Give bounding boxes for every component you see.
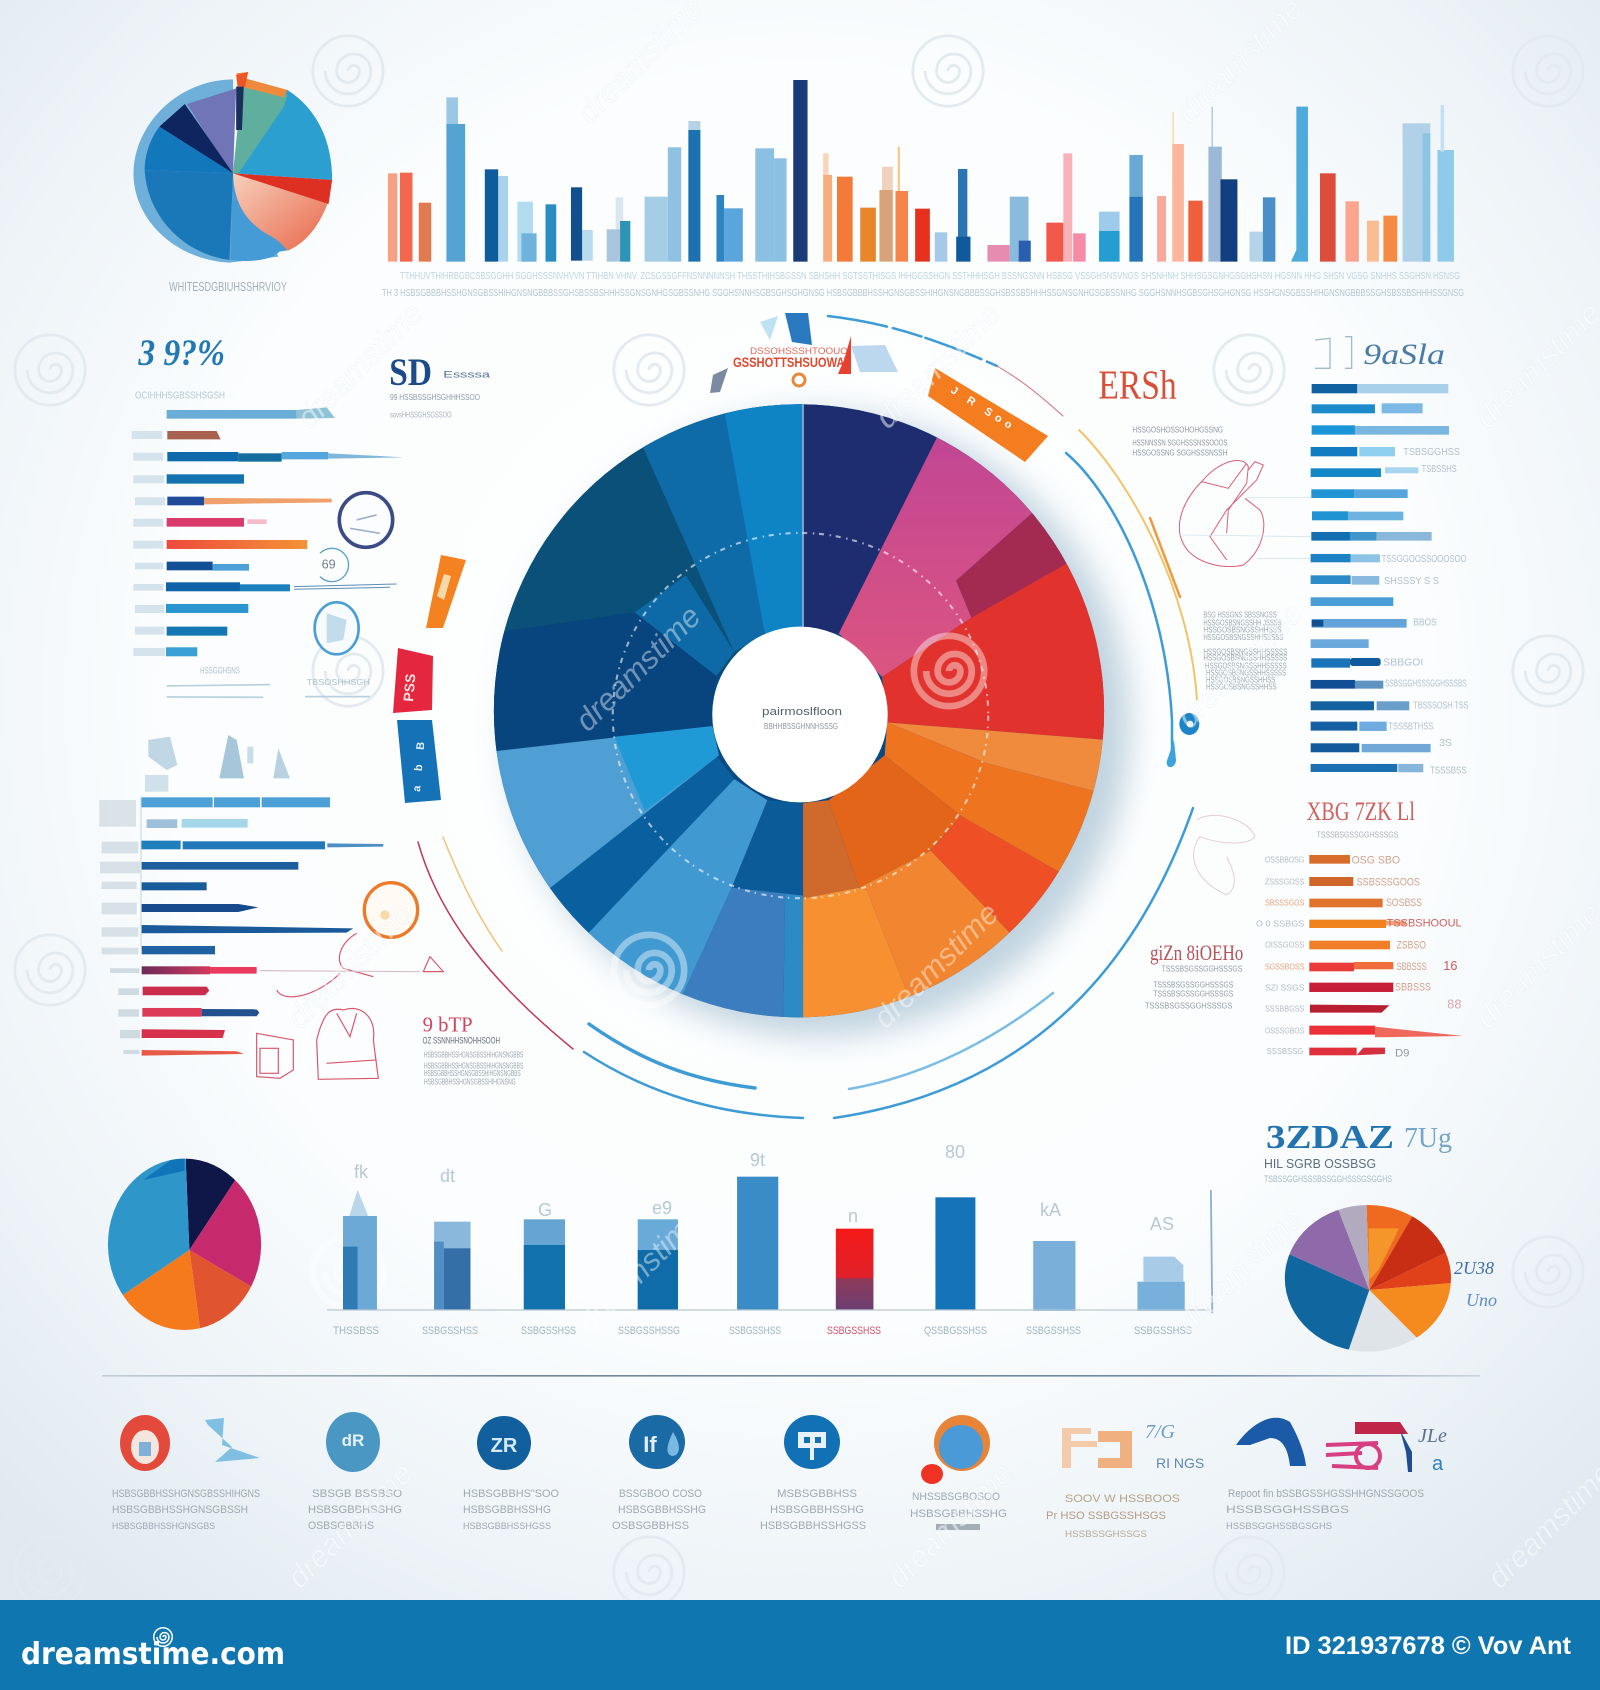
panel: upper right blue bars (1098, 337, 1469, 776)
bottom chart value glyphs: fk (354, 1162, 369, 1182)
rows (1312, 384, 1357, 393)
row: navy and orange (167, 497, 204, 505)
watermark wordmarks: dreamstime (570, 1201, 709, 1340)
row labels: names (1256, 854, 1305, 1056)
icon label: peach sub: RI NGS (1156, 1455, 1204, 1471)
row labels: names: SSSBBGSS (1265, 1004, 1304, 1014)
subheading: SD: SD (389, 350, 432, 394)
footer logo text: dreamstime.com (21, 1637, 285, 1672)
hub text: pairmoslfloon (762, 706, 842, 718)
caption group six: NHSSBSGBOSOO (912, 1491, 1000, 1503)
bottom chart value glyphs: n (848, 1206, 858, 1226)
outer ring arcs around the wheel (418, 316, 1197, 1118)
row labels: values (1352, 854, 1462, 1060)
inner dashed ring (613, 533, 988, 898)
donut wheel chart (494, 404, 1104, 1018)
bottom chart value glyphs: 9t (750, 1150, 765, 1170)
row: navy and light blue (167, 562, 213, 570)
row: brown (167, 431, 221, 439)
footer id text: ID 321937678 © Vov Ant (1285, 1632, 1572, 1660)
segment: orange (859, 850, 1010, 997)
row labels: values: TSSBSHOOUL (1387, 918, 1462, 930)
hub (712, 627, 888, 802)
block text lower: HSSGOSBSNGSSHHSSSSS (1206, 668, 1286, 677)
caption group three: HSBSGBBHSSHG (463, 1504, 551, 1516)
bottom chart labels: SSBGSSHSS (729, 1325, 781, 1337)
block text upper: HSSGOSHOSSOHOHGSSNG (1132, 426, 1223, 435)
icon row (120, 1412, 1447, 1484)
subheading caption: Essssa (443, 369, 491, 379)
center divider (802, 404, 804, 628)
block text: HSBSGBBHSSHGNSGBSSHIHGNSNGBBS (424, 1061, 523, 1070)
block text lower: HSSGOSBSNGSSHHSSS (1203, 626, 1282, 635)
watermark wordmarks: dreamstime (568, 599, 707, 738)
segment: lower dark blue (494, 612, 634, 750)
row: light blue (166, 647, 197, 656)
row: light blue (167, 410, 297, 419)
panel: upper left bars (132, 333, 491, 697)
icon: red badge (120, 1415, 170, 1471)
row labels: names: O 0 SSBGS (1256, 919, 1305, 929)
row labels: values: ZSBSO (1397, 939, 1426, 951)
block text: TSSSBSGSSGGHSSSGS (1162, 964, 1242, 973)
divider (102, 1375, 1480, 1377)
bottom chart value glyphs: AS (1150, 1214, 1174, 1234)
row: plum to pink (142, 966, 210, 974)
pie value label: 2U38 (1454, 1258, 1494, 1278)
block text lower: HSSGOSBSNGSSHHSS (1206, 676, 1275, 685)
icon: orange magnifier (921, 1415, 990, 1484)
bar chart: bottom row left group (343, 1177, 778, 1310)
icon: small ring (320, 548, 349, 582)
row: long blue (142, 925, 353, 933)
panel: lower left bars (99, 735, 523, 1086)
block subheading: OZ SSNNHHSNOHHSOOH (423, 1035, 500, 1045)
heading: 3 9?% (137, 333, 225, 374)
row labels: names: OSSBBOSG (1265, 854, 1305, 864)
bottom chart value glyphs: 80 (945, 1142, 965, 1162)
caption group four: BSSGBOO COSO (619, 1488, 702, 1500)
block text upper (1132, 426, 1228, 457)
row: orange gradient (167, 540, 307, 549)
panel: upper left bars: TBSOSHHSGH (307, 677, 370, 687)
segment: brown orange (803, 800, 859, 898)
row: crimson (143, 987, 209, 995)
red title: ERSh (1098, 362, 1177, 408)
watermark wordmarks: dreamstime (1170, 1201, 1309, 1340)
segment: crimson (956, 513, 1066, 618)
caption group two (308, 1488, 402, 1532)
row labels: TSBSGGHSS (1403, 447, 1460, 458)
segment: dark lower blue (732, 800, 803, 896)
top banner illustration: GSSHOTTSHSUOWAY (733, 354, 852, 370)
bottom chart labels: SSBGSSHSS (1026, 1325, 1081, 1337)
segment: dark blue spoke (550, 756, 734, 932)
row labels: names: SGSSBOSS (1265, 961, 1304, 971)
caption group one: HSBSGBBHSSHGNSGBS (112, 1521, 215, 1531)
bottom chart value glyphs: dt (440, 1166, 455, 1186)
icon: blue badge three (629, 1415, 685, 1469)
bottom chart axis (327, 1309, 1210, 1311)
icon label: right sub: a (1432, 1453, 1444, 1475)
heading: XBG 7ZK Ll (1307, 797, 1415, 826)
caption: bottom right: HIL SGRB OSSBSG (1264, 1156, 1376, 1171)
blue tag: left (397, 720, 441, 803)
caption group seven: SOOV W HSSBOOS (1065, 1493, 1180, 1505)
subheading: TSSSBSGSSGGHSSSGS (1317, 830, 1398, 839)
row labels: values: OSG SBO (1352, 854, 1400, 866)
row labels: TSSSBSS (1430, 765, 1467, 776)
segment: light lower blue (588, 779, 768, 994)
bar chart: bottom row right group (836, 1190, 1212, 1313)
block text lower: HSSGOSBSNGSSHHSSSSS (1205, 661, 1287, 670)
block text (424, 1050, 523, 1086)
segment: bright inner blue (614, 726, 719, 811)
row labels: values: 16 (1443, 959, 1457, 973)
icon: orange ring (364, 883, 418, 937)
caption line: bottom right: TSBSSGGHSSSBSSGGHSSSGSGGHS (1264, 1174, 1392, 1184)
block text: TSSSBSGSSGGHSSSGS (1153, 990, 1233, 999)
row caption: OCIHHHSGBSSHSGSH (135, 390, 225, 401)
bar chart axis labels (382, 271, 1464, 299)
row: navy arrow (142, 904, 258, 912)
heading: 9aSla (1363, 339, 1445, 371)
icon: small ring: 69 (322, 557, 336, 571)
row labels: 3S (1439, 738, 1452, 749)
row labels: values: SBBSSS (1397, 961, 1427, 973)
row: blue four (142, 946, 215, 954)
orange tag: top right: J R Soo (948, 384, 1014, 432)
block text lower (1203, 610, 1287, 691)
icon: blue badge three: If (643, 1432, 657, 1457)
row labels: TSSGGOOSSOOOSOO (1382, 554, 1467, 565)
segment: red (882, 564, 1104, 740)
icon: navy stroke (1400, 1430, 1412, 1472)
bottom chart labels: SSBGSSHSS (422, 1325, 478, 1337)
footer logo spiral (154, 1628, 172, 1646)
watermark wordmarks: dreamstime (868, 296, 1007, 435)
row: red (142, 1029, 225, 1038)
row: blue (141, 841, 181, 849)
bottom chart labels: SSBGSSHSSG (618, 1325, 680, 1337)
bottom chart value glyphs (354, 1142, 1174, 1234)
icon: blue ring dot (1179, 713, 1199, 735)
icon: red sketch (257, 933, 443, 1079)
blue tag: left: a b B (411, 741, 427, 792)
icon: red heart sketch (1179, 461, 1264, 567)
caption group five: HSBSGBBHSSHGSS (760, 1520, 866, 1532)
icon label: right: JLe (1418, 1425, 1447, 1447)
icon: blue ring (315, 602, 359, 654)
row labels: TBSSSOSH TSS (1413, 701, 1469, 712)
block text: HSBSGBBHSSHGNSGBSSHIHGNSNG (424, 1077, 516, 1086)
row labels: names: ZSSSGOSS (1265, 876, 1304, 886)
row: pink and navy (142, 1008, 202, 1017)
icon label: peach: 7/G (1145, 1421, 1176, 1443)
row labels: values: D9 (1395, 1048, 1409, 1060)
block text upper: HSSGOSSNG SGGHSSSNSSH (1132, 448, 1228, 457)
bottom chart labels (333, 1325, 1192, 1337)
pie chart: bottom right (1284, 1205, 1451, 1352)
small icons above bars (145, 735, 290, 792)
pie chart: bottom left (108, 1158, 262, 1330)
segment: magenta (838, 438, 1032, 677)
block text lower: HSSGOSBSNGSSHHSS (1206, 682, 1277, 691)
watermark wordmarks: dreamstime (280, 1456, 419, 1595)
watermark wordmarks: dreamstime (290, 296, 429, 435)
segment: deep orange (829, 755, 961, 888)
icon: pale blue glyph (205, 1418, 260, 1462)
row labels: BBOS (1413, 617, 1437, 628)
icon: pale sketch (1194, 815, 1255, 895)
caption group six (910, 1491, 1007, 1530)
watermark wordmarks (280, 0, 1600, 1595)
watermark wordmarks: dreamstime (866, 896, 1005, 1035)
caption group seven: HSSBSSGHSSGS (1065, 1529, 1147, 1539)
footer band (0, 1600, 1600, 1690)
segment: light left blue (496, 726, 719, 888)
row: orange red (142, 1050, 244, 1056)
block text lower: BSG HSSGNS SBSSNGSS (1203, 610, 1277, 619)
row labels: TSBSSHS (1422, 464, 1457, 475)
caption group one: HSBSGBBHSSHGNSGBSSH (112, 1504, 248, 1516)
block text lower: HSSGOSBSNGSSHHSSSSS (1203, 654, 1287, 663)
bottom chart value glyphs: kA (1040, 1200, 1061, 1220)
caption group five: HSBSGBBHSSHG (770, 1504, 864, 1516)
segment: lower blue (682, 888, 785, 1017)
heading icons (1315, 337, 1352, 368)
caption group seven (1046, 1493, 1180, 1539)
row labels: names: SZI SSGS (1265, 983, 1305, 993)
caption group eight (1226, 1488, 1424, 1531)
icon: blue badge one (326, 1412, 380, 1472)
row: blue stack (167, 452, 238, 461)
bottom chart labels: THSSBSS (333, 1325, 379, 1337)
caption group eight: Repoot fin bSSBGSSHGSSHHGNSSGOOS (1228, 1488, 1424, 1500)
caption group five: MSBSGBBHSS (777, 1488, 857, 1500)
segment: top blue (724, 404, 803, 634)
row labels: SSBSGGHSSSGGHSSSBS (1385, 679, 1467, 690)
bar chart: top row (388, 80, 1454, 262)
segment: inner blue (635, 575, 734, 676)
caption group two: SBSGB BSSBSO (312, 1488, 402, 1500)
segment: warm orange (803, 888, 909, 1018)
caption group six: HSBSGBBHSSHG (910, 1508, 1007, 1520)
footnotes: HSSGGHSNS (200, 665, 240, 675)
caption group two: HSBSGBBHSSHG (308, 1504, 402, 1516)
segment: dark teal (499, 444, 746, 674)
hub text (762, 706, 842, 731)
caption line two: sovsHHSSGHSGSSOO (390, 410, 452, 419)
block text lower: HSSGOSBSNGSSHHSSSSS (1203, 647, 1287, 656)
watermark wordmarks: dreamstime (880, 1456, 1019, 1595)
labels (99, 800, 140, 1054)
caption group eight: HSSBSGGHSSBGS (1226, 1504, 1349, 1516)
segment: mid orange (884, 722, 1094, 872)
caption group one: HSBSGBBHSSHGNSGBSSHIHGNS (112, 1488, 260, 1500)
caption group four: OSBSGBBHSS (612, 1520, 689, 1532)
heading: bottom right: 3ZDAZ (1266, 1119, 1394, 1156)
block text (1145, 964, 1242, 1010)
watermark wordmarks: dreamstime (280, 896, 419, 1035)
row labels: values: SOSBSS (1386, 897, 1422, 909)
pie value sublabel: Uno (1466, 1290, 1497, 1310)
block heading: 9 bTP (423, 1015, 473, 1037)
block text: HSBSGBBHSSHGNSGBSSHIHGNSNGBBS (424, 1069, 521, 1078)
icon captions (112, 1488, 1424, 1539)
segment: navy (803, 404, 937, 634)
caption group two: OSBSGBBHS (308, 1520, 374, 1532)
caption line one: 99 HSSBSSGHSGHHHSSOO (390, 392, 480, 402)
icon: blue badge two: ZR (491, 1435, 518, 1457)
bottom bar watermark spirals (313, 1237, 984, 1307)
block text: HSBSGBBHSSHGNSGBSSHIHGNSNGBBS (424, 1050, 523, 1059)
block heading: giZn 8iOEHo (1150, 940, 1243, 965)
row labels: names: SSSBSSG (1267, 1046, 1304, 1056)
bottom chart labels: QSSBGSSHSS (924, 1325, 987, 1337)
icon: blue badge two (477, 1416, 531, 1470)
row labels: values: SSBSSSGOOS (1357, 876, 1420, 888)
row: blue three (142, 882, 207, 890)
rows (1309, 855, 1350, 864)
row labels: TSSSBTHSS (1388, 721, 1434, 732)
icon: pink glyph (1326, 1443, 1380, 1468)
bottom chart labels: SSBGSSHSS (827, 1325, 881, 1337)
row labels: names: OSSSGBOS (1265, 1025, 1304, 1035)
watermark wordmarks: dreamstime (1170, 596, 1309, 735)
icon: crimson flag (1355, 1422, 1408, 1434)
row: pink (167, 518, 244, 527)
block text upper: HSSNNSSN SGGHSSSNSSOOOS (1132, 438, 1227, 447)
row: light blue (141, 797, 213, 807)
row: blue (167, 474, 244, 484)
top banner illustration: DSSOHSSSHTOOUO (750, 346, 848, 356)
bottom chart labels: SSBGSSHSS (1134, 1325, 1192, 1337)
row: blue with lines (166, 582, 240, 591)
icon: peach glyphs (1062, 1428, 1132, 1468)
caption group four (612, 1488, 706, 1532)
red tag: left (393, 648, 433, 713)
row: blue (167, 627, 227, 636)
orange tag: top right (928, 368, 1048, 462)
segment: red orange (930, 816, 1058, 932)
block text lower: HSSGOSBSNGSSHH JSSSS (1203, 618, 1282, 627)
icon: blue drip (1167, 740, 1176, 767)
caption group eight: HSSBSGGHSSBGSGHS (1226, 1521, 1332, 1531)
caption group seven: Pr HSO SSBGSSHSGS (1046, 1510, 1166, 1522)
bottom chart labels: SSBGSSHSS (521, 1325, 576, 1337)
segment: mid blue (643, 404, 803, 652)
wheel watermark spirals (614, 636, 984, 1005)
icon: navy ring (339, 493, 393, 547)
caption group five (760, 1488, 866, 1532)
pie chart caption: WHITESDGBIUHSSHRVIOY (169, 279, 287, 294)
row: blue two (142, 862, 298, 870)
leader lines (1180, 497, 1311, 559)
hub text: BBHHBSSGHNNHSSSG (764, 722, 838, 731)
row labels: SHSSSY S S (1384, 576, 1439, 587)
row labels: values: SBBSSS (1395, 982, 1431, 994)
row labels: SBBGOI (1383, 657, 1423, 668)
segment: lower blue sliver (783, 893, 804, 1018)
axis (139, 797, 142, 947)
bottom chart value glyphs: e9 (652, 1198, 672, 1218)
row labels (132, 431, 165, 656)
panel: lower right orange and red bars (1145, 797, 1463, 1060)
bottom chart value glyphs: G (538, 1200, 552, 1220)
icon: blue badge one: dR (342, 1431, 364, 1450)
red tag: left: PSS (400, 673, 418, 702)
row labels (1382, 447, 1469, 776)
orange tag: left (426, 555, 466, 628)
row labels: values: 88 (1447, 997, 1461, 1011)
row: bright blue (166, 604, 248, 613)
row: pale (147, 819, 177, 828)
wheel drop shadow (510, 413, 1130, 1037)
pie chart: top left (133, 72, 332, 263)
row labels: names: SBSSSGGS (1265, 898, 1304, 908)
caption group three (463, 1488, 559, 1531)
top banner illustration (710, 313, 898, 393)
icon: blue arch (1236, 1418, 1306, 1466)
caption group four: HSBSGBBHSSHG (618, 1504, 706, 1516)
segment: light orange (888, 722, 1103, 791)
caption group three: HSBSGBBHSSHGSS (463, 1521, 551, 1531)
block text: TSSSBSGSSGGHSSSGS (1145, 1001, 1232, 1010)
row labels: names: OISSGOSS (1265, 940, 1305, 950)
block text: TSSSBSGSSGGHSSSGS (1153, 980, 1233, 989)
icon: blue badge four (784, 1415, 840, 1469)
block text lower: HSSGOSBSNGSSHHSSSSS (1203, 633, 1283, 642)
heading suffix: 7Ug (1404, 1123, 1452, 1154)
caption group one (112, 1488, 260, 1531)
caption group three: HSBSGBBHS"SOO (463, 1488, 559, 1500)
